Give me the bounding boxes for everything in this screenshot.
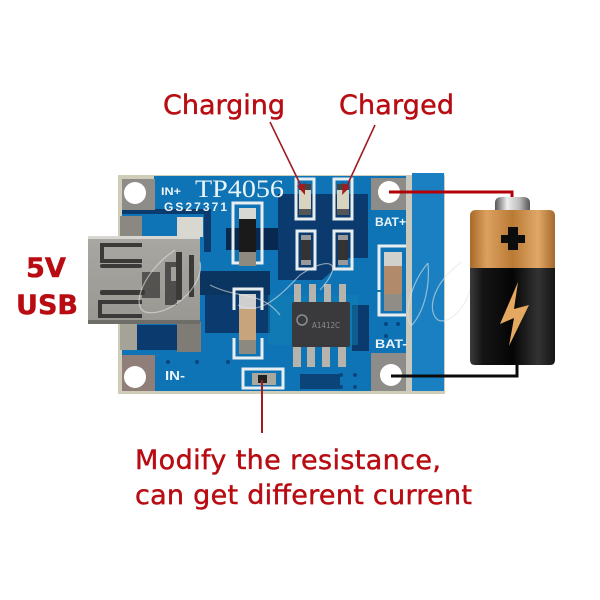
label: 5V USB xyxy=(16,253,78,321)
mounting hole: BAT- xyxy=(371,353,406,391)
red wire to battery positive xyxy=(389,192,512,197)
battery black body xyxy=(470,268,555,365)
silkscreen labels: BAT- xyxy=(375,337,407,351)
circuit board xyxy=(88,173,445,394)
battery cap xyxy=(495,197,530,210)
dark traces xyxy=(122,209,211,252)
capacitor right xyxy=(379,246,406,315)
resistor R3 top xyxy=(233,203,262,266)
battery xyxy=(470,197,555,365)
mini USB connector xyxy=(88,236,200,324)
mounting hole: bottom left xyxy=(122,355,155,391)
label: 5V USB: USB xyxy=(16,290,78,321)
label: modify the resistance: Modify the resistance, xyxy=(135,445,441,476)
charged LED xyxy=(334,179,352,219)
silkscreen labels: TP4056 xyxy=(195,176,284,203)
arrow: to charged LED xyxy=(342,125,375,195)
label: Charging: Charging xyxy=(163,90,285,121)
board base xyxy=(118,175,445,394)
watermark xyxy=(139,250,472,325)
arrow: to charging LED xyxy=(270,122,305,195)
lightning bolt xyxy=(500,282,529,346)
label: modify the resistance: can get different current xyxy=(135,480,472,511)
capacitor left xyxy=(234,289,262,358)
mounting hole: BAT+ xyxy=(371,178,406,210)
battery copper top xyxy=(470,210,555,268)
silkscreen labels: BAT+ xyxy=(375,215,406,229)
black wire to battery negative xyxy=(391,365,517,376)
mounting hole: top left xyxy=(122,179,155,210)
sense resistor xyxy=(243,369,283,388)
TP4056 chip: A1412C xyxy=(312,321,340,330)
TP4056 chip xyxy=(292,284,350,367)
label: modify the resistance xyxy=(135,445,472,511)
plus sign xyxy=(501,227,525,250)
charging LED xyxy=(296,179,314,219)
arrow: to sense resistor xyxy=(261,380,263,433)
USB shell tabs xyxy=(120,216,203,352)
label: Charged: Charged xyxy=(339,90,454,121)
silkscreen labels xyxy=(161,176,407,383)
silkscreen labels: GS27371 xyxy=(164,200,227,214)
silkscreen labels: IN- xyxy=(165,368,185,383)
solder vias xyxy=(166,322,400,389)
silkscreen labels: IN+ xyxy=(161,186,181,198)
resistors below LEDs xyxy=(297,231,352,269)
label: 5V USB: 5V xyxy=(26,253,66,284)
